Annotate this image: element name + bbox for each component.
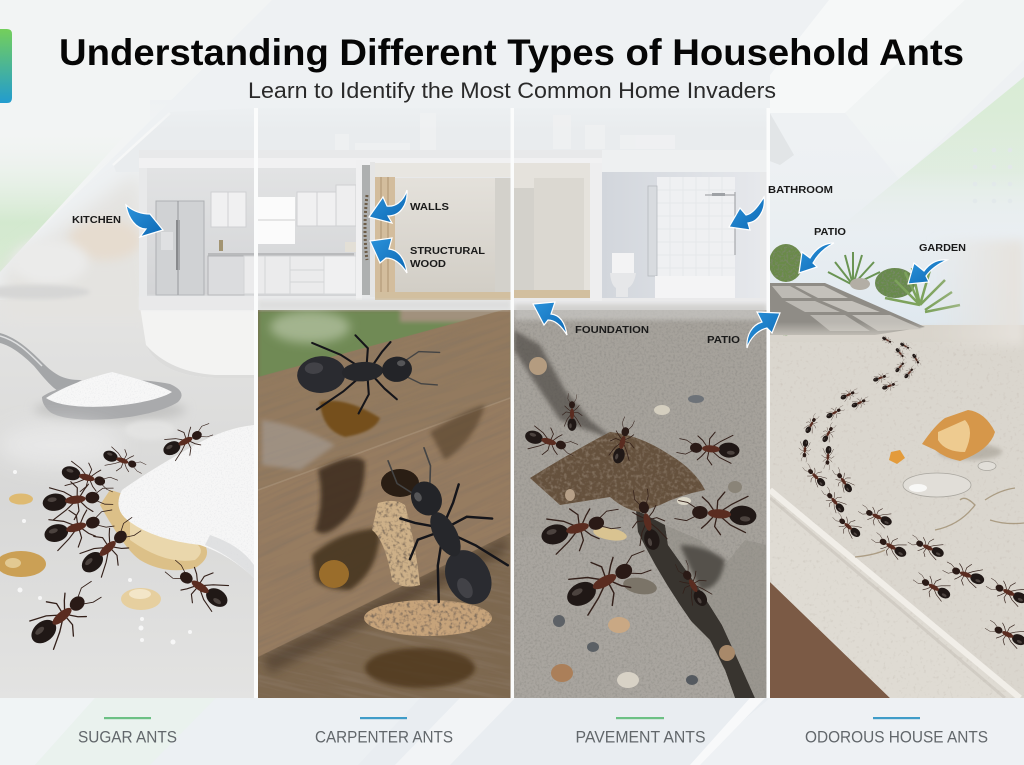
arrow and label: bathroom xyxy=(729,184,833,230)
arrow and label: foundation: FOUNDATION xyxy=(575,324,649,336)
title: Understanding Different Types of Household Ants xyxy=(59,31,964,73)
panel dividers xyxy=(254,108,770,698)
arrow and label: bathroom: BATHROOM xyxy=(768,184,833,196)
room: walls and structural wood xyxy=(356,160,514,300)
water droplets xyxy=(903,462,996,497)
upper floor fixtures xyxy=(335,113,675,151)
arrow and label: walls: WALLS xyxy=(410,201,449,213)
room: bathroom xyxy=(602,150,767,298)
label: pavement ants: PAVEMENT ANTS xyxy=(576,728,706,746)
syrup spill xyxy=(100,490,207,570)
blurred green background xyxy=(258,305,510,380)
garden bushes and plants xyxy=(769,244,960,335)
fades into photos xyxy=(139,296,767,320)
label: odorous house ants: ODOROUS HOUSE ANTS xyxy=(805,728,988,746)
footer band xyxy=(0,698,1024,765)
seeds carried by ants xyxy=(592,525,658,597)
bread crumb xyxy=(889,410,1002,464)
patio stones xyxy=(770,283,925,335)
pebbles xyxy=(529,357,742,688)
kitchen cabinets xyxy=(211,185,356,244)
counter top xyxy=(770,239,1024,618)
arrow and label: foundation xyxy=(533,302,649,336)
decorative dot grid xyxy=(973,148,1012,203)
pavement ants xyxy=(521,393,758,623)
arrow and label: kitchen: KITCHEN xyxy=(72,214,121,226)
label: sugar ants xyxy=(78,717,177,746)
arrow and label: walls xyxy=(369,190,449,223)
moisture stains xyxy=(262,401,485,590)
white sugar bowl xyxy=(140,310,254,375)
counter front edge xyxy=(770,488,1022,698)
label: sugar ants: SUGAR ANTS xyxy=(78,728,177,746)
sugar ants xyxy=(29,423,229,650)
arrow and label: garden: GARDEN xyxy=(919,242,966,254)
marble veins xyxy=(855,488,1024,557)
carpenter ants xyxy=(297,334,510,604)
syrup drops xyxy=(0,494,161,610)
arrow and label: kitchen xyxy=(72,205,163,237)
arrow and label: structural wood: STRUCTURAL xyxy=(410,245,486,257)
arrow and label: garden xyxy=(908,242,966,284)
arrow and label: structural wood xyxy=(370,238,486,273)
arrow and label: patio (counter) xyxy=(707,312,780,348)
subtitle: Learn to Identify the Most Common Home Invaders xyxy=(248,78,776,103)
bore hole and sawdust xyxy=(364,469,492,636)
spoon with sugar xyxy=(0,333,186,422)
room: hallway xyxy=(514,163,602,301)
dirt mound xyxy=(530,432,705,512)
pavement crack xyxy=(514,330,766,698)
label: carpenter ants: CARPENTER ANTS xyxy=(315,728,453,746)
label: carpenter ants xyxy=(315,717,453,746)
arrow and label: patio (counter): PATIO xyxy=(707,334,740,346)
arrow and label: patio (garden): PATIO xyxy=(814,226,846,238)
house frame xyxy=(139,150,767,310)
refrigerator xyxy=(156,201,204,295)
panel: carpenter ants photo xyxy=(258,310,510,698)
small water beads xyxy=(13,470,192,644)
arrow and label: structural wood: WOOD xyxy=(410,258,446,270)
wood beam xyxy=(258,310,510,657)
house cutaway illustration xyxy=(113,100,794,320)
lower plank xyxy=(258,539,510,698)
roof xyxy=(113,100,794,172)
sugar pile xyxy=(118,425,254,578)
room: kitchen xyxy=(147,168,357,296)
panel: sugar ants photo xyxy=(0,170,254,698)
panel: odorous house ants photo xyxy=(770,238,1024,698)
toilet xyxy=(610,253,636,297)
panel: pavement ants photo xyxy=(514,300,767,698)
logo tab xyxy=(0,29,12,103)
arrow and label: patio (garden) xyxy=(799,226,846,273)
spilled grains xyxy=(0,420,175,467)
label: pavement ants xyxy=(576,717,706,746)
counter and base cabinets xyxy=(208,240,357,295)
odorous house ants xyxy=(798,335,1024,652)
